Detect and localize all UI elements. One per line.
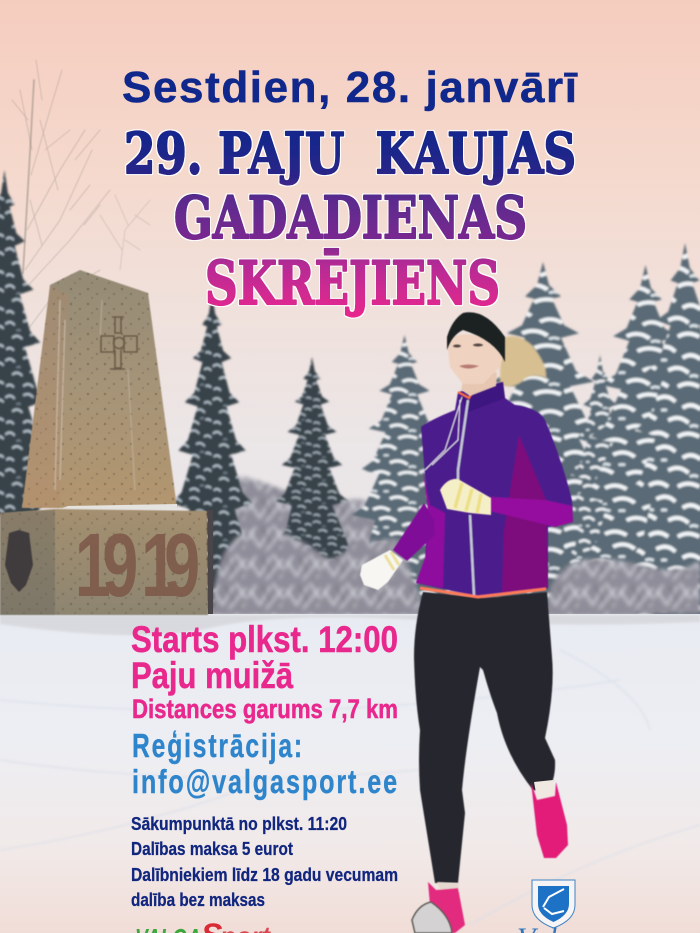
- heading: date: Sestdien, 28. janvārī: [122, 63, 578, 112]
- sleeve forearm: [490, 497, 573, 527]
- tree: far right: [625, 243, 700, 618]
- tree: slim centre: [276, 357, 348, 573]
- registration email: info@valgasport.ee: [132, 763, 399, 800]
- obelisk: [22, 270, 177, 508]
- lower shoe: [412, 882, 465, 933]
- post shadow: [208, 510, 213, 614]
- background: pink winter sky: [0, 0, 700, 620]
- snow ridge at horizon: [0, 615, 700, 635]
- tree: centre behind runner: [352, 335, 457, 605]
- fee: Dalības maksa 5 eurot: [131, 839, 293, 859]
- arm emblem: [543, 889, 564, 914]
- tree: behind runner head: [468, 262, 618, 607]
- hem: [420, 588, 546, 597]
- cross emblem: [101, 317, 137, 369]
- neck: [461, 372, 497, 396]
- jacket: [393, 382, 573, 598]
- spruce trees: [0, 170, 700, 618]
- orange collar lining: [458, 392, 472, 398]
- monument: [0, 270, 213, 616]
- bare birch tree: [12, 60, 150, 340]
- year 1919: 1919: [75, 515, 200, 616]
- ankle: [437, 882, 459, 892]
- logo: Valga coat of arms: [517, 880, 589, 933]
- title line 3: SKRĒJIENS: [205, 249, 500, 319]
- leggings: [414, 592, 555, 883]
- right hand glove: [440, 479, 491, 515]
- heading: race title: [124, 121, 576, 319]
- tree: small between: [565, 355, 635, 595]
- side panel right: [502, 435, 548, 594]
- headband: [447, 312, 505, 362]
- snow ground: [0, 614, 700, 933]
- upper shoe: [531, 780, 568, 858]
- forest background band: [205, 477, 700, 615]
- grey sole: [412, 902, 452, 933]
- eyes and lips: [453, 344, 483, 368]
- shrubs centre: [212, 529, 425, 612]
- ponytail: [500, 336, 546, 387]
- info block: start: [131, 619, 398, 724]
- shield blue field: [538, 886, 569, 922]
- earphone cable: [425, 397, 462, 470]
- distance: Distances garums 7,7 km: [132, 694, 398, 724]
- registration label: Reģistrācija:: [132, 727, 304, 764]
- info block: registration: [132, 727, 399, 800]
- info block: details: [131, 814, 398, 910]
- torso: [416, 382, 573, 598]
- ski track lines: [0, 650, 700, 925]
- pink upper: [428, 882, 465, 933]
- sock: [534, 780, 556, 804]
- shield outline: [532, 880, 575, 928]
- start place: Paju muižā: [131, 655, 293, 696]
- shield relief: [5, 530, 33, 592]
- logo: Valga Sport: [135, 917, 272, 933]
- left arm: [393, 503, 435, 561]
- title line 1: 29. PAJU KAUJAS: [124, 121, 576, 187]
- left hand glove: [360, 550, 403, 590]
- runner: [360, 312, 573, 933]
- side panel left: [416, 470, 445, 588]
- pink shoe: [531, 782, 568, 858]
- zipper: [458, 400, 474, 595]
- face: [447, 334, 505, 384]
- snow ledge: [60, 504, 177, 509]
- title line 2: GADADIENAS: [174, 184, 527, 252]
- shrubs right: [545, 559, 700, 614]
- tree: behind monument right: [172, 293, 252, 608]
- tree: far left: [0, 170, 47, 515]
- tree: right: [578, 265, 700, 610]
- youth fee line 1: Dalībniekiem līdz 18 gadu vecumam: [131, 865, 398, 885]
- lower shrubs: [212, 529, 700, 614]
- start point time: Sākumpunktā no plkst. 11:20: [131, 814, 347, 834]
- youth fee line 2: dalība bez maksas: [131, 890, 265, 910]
- start time: Starts plkst. 12:00: [131, 619, 398, 660]
- collar: [458, 382, 505, 412]
- pedestal: [0, 509, 208, 615]
